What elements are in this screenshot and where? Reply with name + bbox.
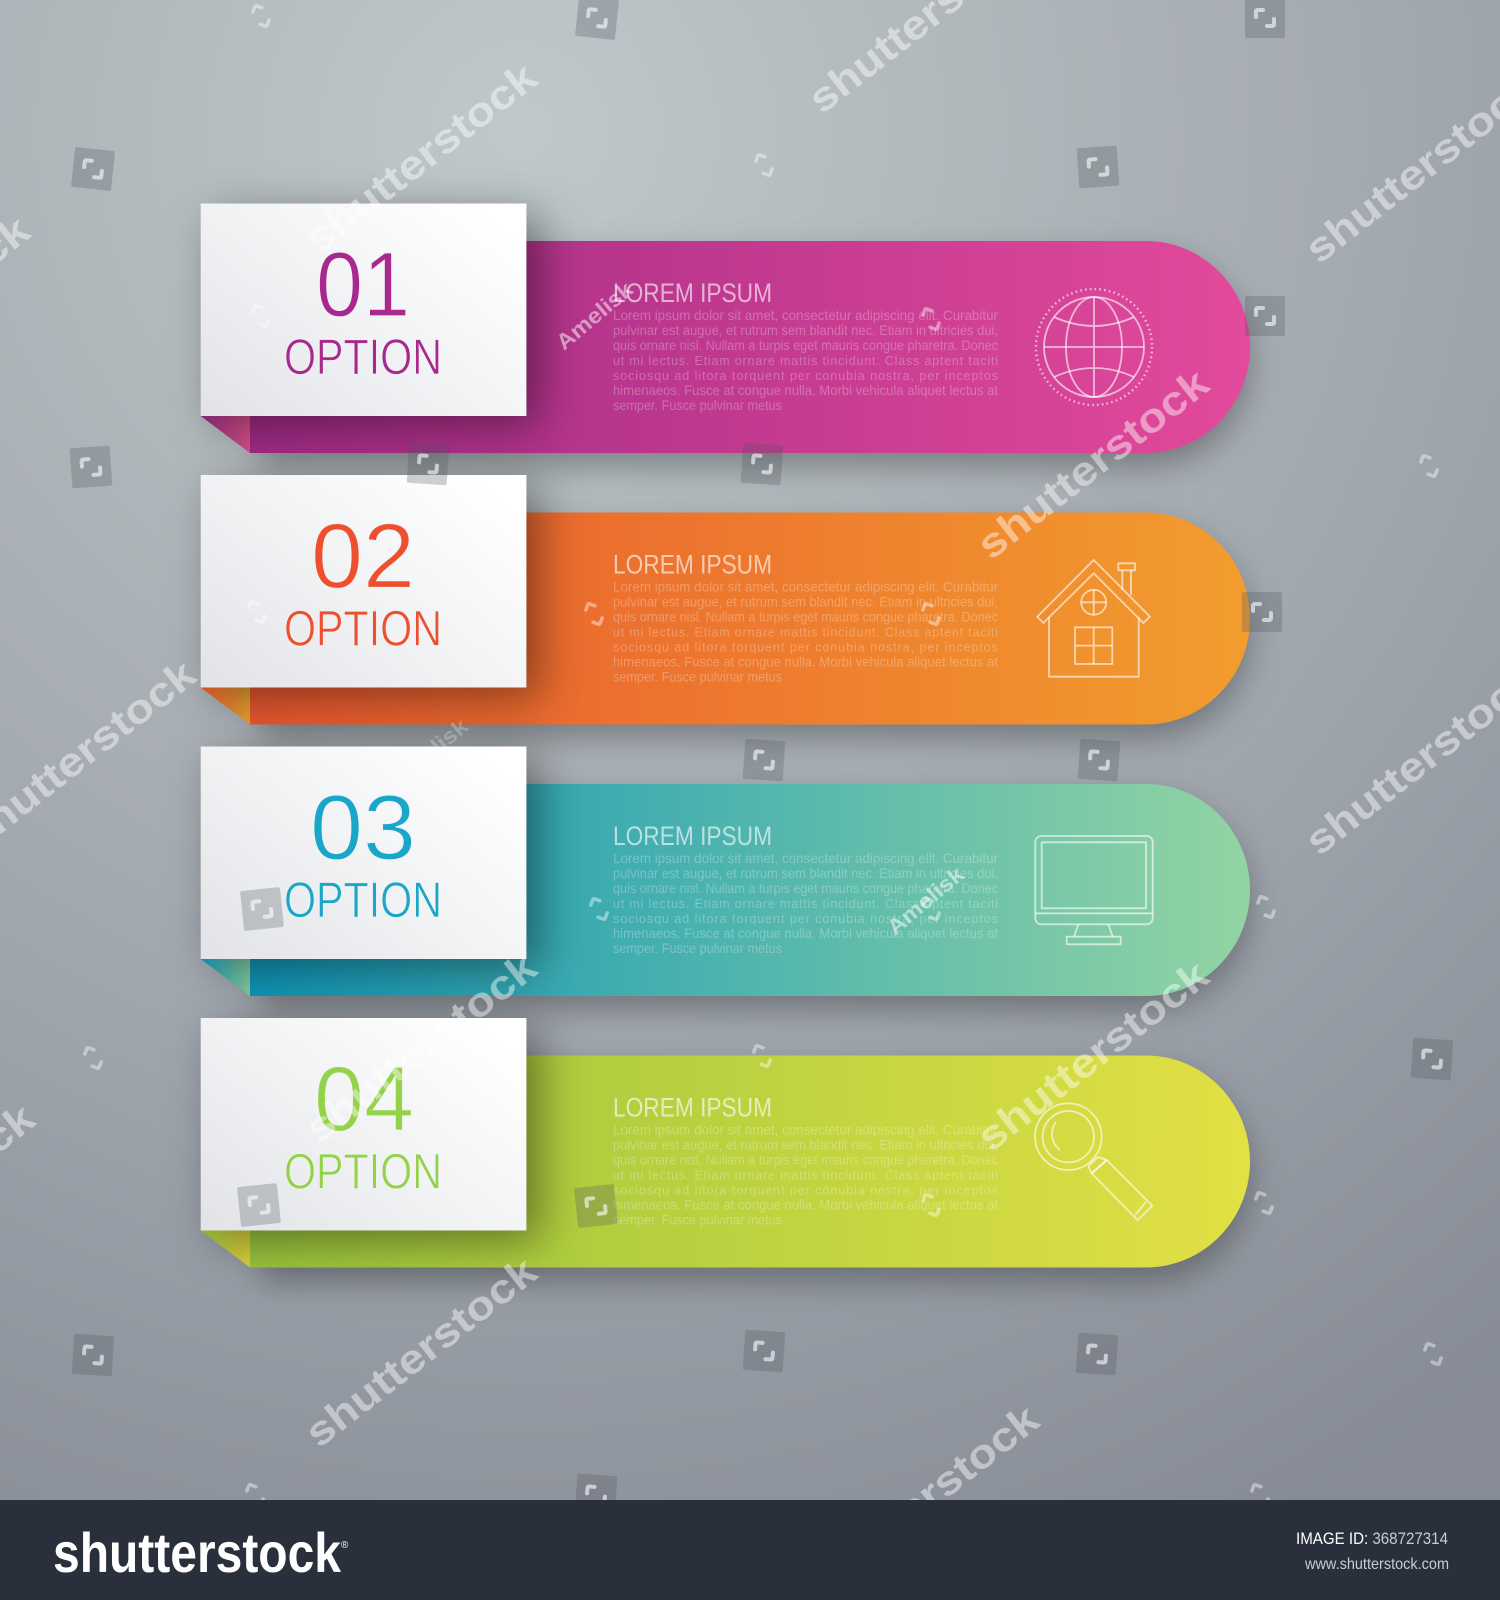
body text: sociosqu ad litora torquent per conubia nostra, per inceptos (613, 640, 998, 654)
fold (201, 416, 250, 453)
body text: himenaeos. Fusce at congue nulla. Morbi vehicula aliquet lectus at (613, 382, 998, 398)
body text: Lorem ipsum dolor sit amet, consectetur adipiscing elit. Curabitur (613, 1122, 998, 1138)
body text (613, 1122, 998, 1228)
card (201, 204, 526, 416)
body text: Lorem ipsum dolor sit amet, consectetur adipiscing elit. Curabitur (613, 850, 998, 866)
watermark wordmarks: shutterstock (296, 943, 545, 1152)
panel: option 04 (201, 1018, 1250, 1282)
watermark wordmarks: shutterstock (798, 1395, 1047, 1600)
icon: globe (1036, 289, 1152, 405)
website: www.shutterstock.com (1304, 1556, 1449, 1573)
body text: semper. Fusce pulvinar metus (613, 940, 782, 956)
watermark author names: Amelisk (551, 276, 638, 355)
fold (201, 688, 250, 724)
option label: OPTION (284, 600, 442, 656)
number: 03 (310, 777, 416, 879)
body text (613, 578, 998, 684)
body text: Lorem ipsum dolor sit amet, consectetur adipiscing elit. Curabitur (613, 578, 998, 594)
fold (201, 959, 250, 996)
body text: sociosqu ad litora torquent per conubia nostra, per inceptos (613, 912, 998, 926)
body text: ut mi lectus. Etiam ornare mattis tincidunt. Class aptent taciti (613, 1168, 998, 1182)
body text: pulvinar est augue, et rutrum sem blandit nec. Etiam in ultricies dui, (613, 594, 998, 610)
heading: LOREM IPSUM (613, 1092, 772, 1122)
watermark author names: Amelisk (882, 861, 969, 940)
card shadow (215, 215, 540, 427)
image id: IMAGE ID: 368727314 (1296, 1529, 1448, 1548)
body text: semper. Fusce pulvinar metus (613, 1212, 782, 1228)
card shadow (215, 1030, 540, 1242)
option label: OPTION (284, 329, 442, 385)
watermark wordmarks: shutterstock (968, 359, 1217, 568)
card shadow (215, 758, 540, 970)
heading: LOREM IPSUM (613, 821, 772, 851)
body text: quis ornare nisl. Nullam a turpis eget mauris congue pharetra. Donec (613, 337, 998, 353)
card (201, 746, 526, 959)
footer bar (0, 1500, 1500, 1600)
body text: sociosqu ad litora torquent per conubia nostra, per inceptos (613, 1184, 998, 1198)
footer logo: shutterstock (53, 1521, 342, 1584)
card (201, 1018, 526, 1230)
ribbon bar (250, 1056, 1250, 1268)
watermark author names (386, 276, 969, 940)
panel: option 03 (201, 746, 1250, 1010)
watermark wordmarks: shutterstock (296, 1247, 545, 1456)
body text: himenaeos. Fusce at congue nulla. Morbi vehicula aliquet lectus at (613, 654, 998, 670)
body text: pulvinar est augue, et rutrum sem blandit nec. Etiam in ultricies dui, (613, 1136, 998, 1152)
card (201, 475, 526, 688)
heading: LOREM IPSUM (613, 550, 772, 580)
fold (201, 1230, 250, 1268)
body text: ut mi lectus. Etiam ornare mattis tincidunt. Class aptent taciti (613, 354, 998, 368)
icon: magnifying glass (1035, 1103, 1152, 1220)
body text: himenaeos. Fusce at congue nulla. Morbi vehicula aliquet lectus at (613, 925, 998, 941)
icon: house (1037, 560, 1150, 677)
icon: monitor (1035, 836, 1153, 944)
watermark wordmarks: shutterstock (968, 951, 1217, 1160)
ribbon bar (250, 241, 1250, 453)
body text: sociosqu ad litora torquent per conubia nostra, per inceptos (613, 369, 998, 383)
body text: Lorem ipsum dolor sit amet, consectetur adipiscing elit. Curabitur (613, 307, 998, 323)
ribbon shadow (260, 798, 1250, 1010)
body text: ut mi lectus. Etiam ornare mattis tincidunt. Class aptent taciti (613, 897, 998, 911)
body text: quis ornare nisl. Nullam a turpis eget mauris congue pharetra. Donec (613, 880, 998, 896)
body text: himenaeos. Fusce at congue nulla. Morbi vehicula aliquet lectus at (613, 1196, 998, 1212)
ribbon shadow (260, 255, 1250, 467)
option label: OPTION (284, 1144, 442, 1200)
ribbon shadow (260, 526, 1250, 738)
body text: semper. Fusce pulvinar metus (613, 397, 782, 413)
body text (613, 850, 998, 956)
ribbon bar (250, 512, 1250, 724)
body text: quis ornare nisl. Nullam a turpis eget mauris congue pharetra. Donec (613, 1152, 998, 1168)
body text: ut mi lectus. Etiam ornare mattis tincidunt. Class aptent taciti (613, 626, 998, 640)
watermark author names: Amelisk (386, 713, 473, 792)
number: 01 (316, 234, 410, 336)
heading: LOREM IPSUM (613, 278, 772, 308)
option label: OPTION (284, 872, 442, 928)
panel: option 01 (201, 204, 1250, 467)
body text (613, 307, 998, 413)
ribbon bar (250, 784, 1250, 996)
panel: option 02 (201, 475, 1250, 738)
body text: pulvinar est augue, et rutrum sem blandit nec. Etiam in ultricies dui, (613, 322, 998, 338)
watermark wordmarks: shutterstock (296, 53, 545, 262)
body text: pulvinar est augue, et rutrum sem blandit nec. Etiam in ultricies dui, (613, 865, 998, 881)
number: 02 (311, 506, 415, 608)
registered mark: ® (341, 1540, 349, 1551)
ribbon shadow (260, 1070, 1250, 1282)
body text: semper. Fusce pulvinar metus (613, 668, 782, 684)
card shadow (215, 486, 540, 698)
body text: quis ornare nisl. Nullam a turpis eget mauris congue pharetra. Donec (613, 608, 998, 624)
number: 04 (314, 1048, 414, 1150)
